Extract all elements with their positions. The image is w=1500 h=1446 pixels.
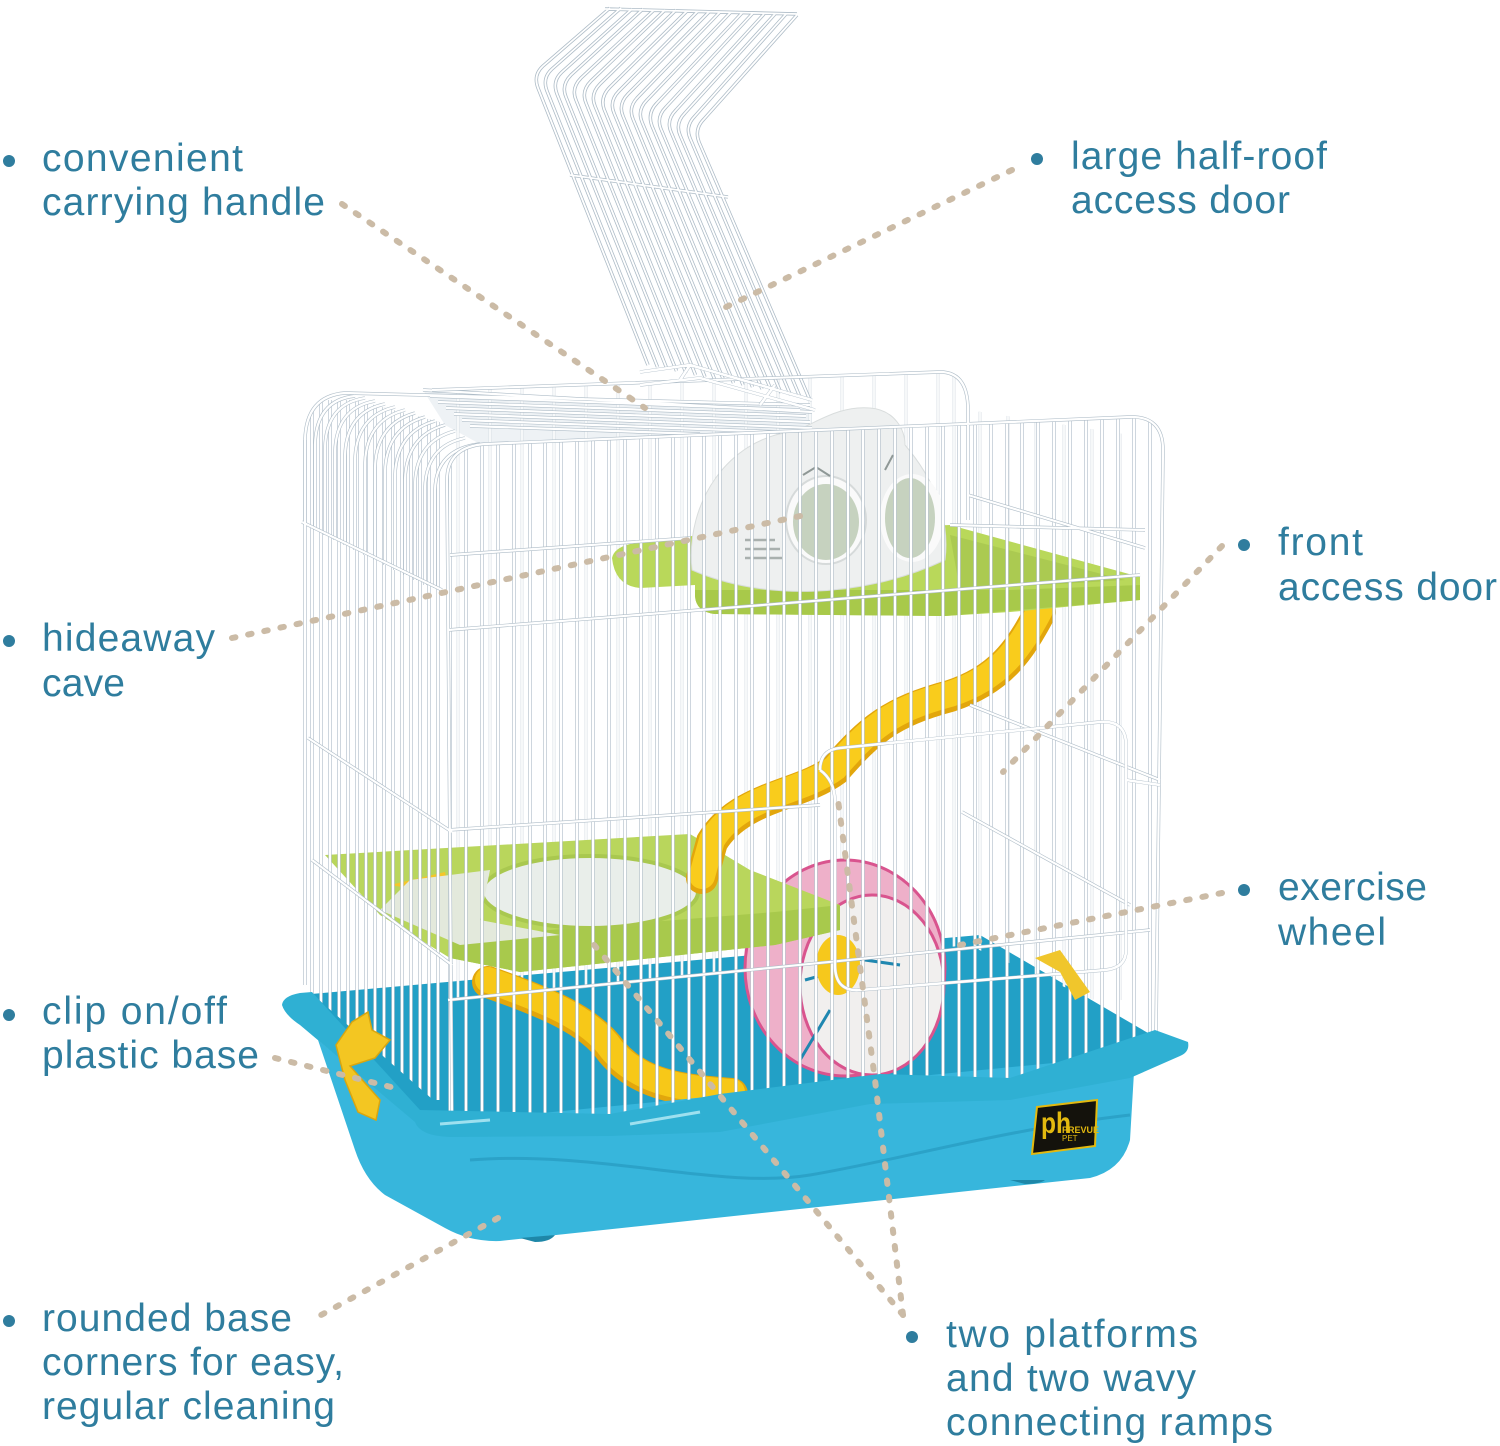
label: hideaway cave [3,617,216,705]
label: exercise wheel: exercise [1278,866,1427,909]
label: large half-roof access door: access door [1071,179,1290,222]
label: front access door: access door [1278,566,1497,609]
upper platform [612,525,1140,616]
tray interior [300,935,1160,1125]
label: exercise wheel: wheel [1277,911,1386,954]
label: hideaway cave: cave [42,662,125,705]
brand logo: ph [1041,1107,1071,1140]
front and side wall wires [302,372,1163,1140]
brand logo [1032,1100,1099,1154]
label: two platforms and ramps: two platforms [946,1313,1198,1356]
label: exercise wheel [1238,866,1427,954]
clip on/off latch left [336,1012,390,1120]
label: convenient carrying handle: convenient [42,137,243,180]
label: rounded base corners: corners for easy, [42,1341,344,1384]
leader lines [232,170,1222,1320]
brand logo: PET [1062,1134,1078,1143]
clip on/off latch right [1035,950,1090,1000]
label: rounded base corners [3,1297,344,1428]
brand logo: PREVUE [1062,1125,1099,1135]
label: large half-roof access door [1031,135,1327,222]
label: clip on/off plastic base: clip on/off [42,990,227,1033]
label: large half-roof access door: large half-roof [1071,135,1327,178]
label: front access door [1238,521,1497,609]
front access door [640,365,1160,990]
exercise wheel [745,860,945,1076]
label: clip on/off plastic base: plastic base [42,1034,259,1077]
lower platform [325,834,840,972]
tray rim [282,992,1188,1137]
label: convenient carrying handle: carrying handle [42,181,325,224]
label: hideaway cave: hideaway [42,617,216,660]
tray body [318,1040,1135,1242]
label: clip on/off plastic base [3,990,259,1077]
label: two platforms and ramps [906,1313,1273,1444]
label: front access door: front [1278,521,1363,564]
label: rounded base corners: regular cleaning [42,1385,335,1428]
label: two platforms and ramps: connecting ramps [946,1401,1273,1444]
back wall wires [458,370,1120,1010]
hideaway cave [691,408,946,591]
roof access door [536,8,810,399]
lower ramp [488,980,732,1094]
upper ramp [702,610,1040,878]
label: convenient carrying handle [3,137,325,224]
roof panel [423,390,812,444]
label: rounded base corners: rounded base [42,1297,292,1340]
label: two platforms and ramps: and two wavy [946,1357,1196,1400]
